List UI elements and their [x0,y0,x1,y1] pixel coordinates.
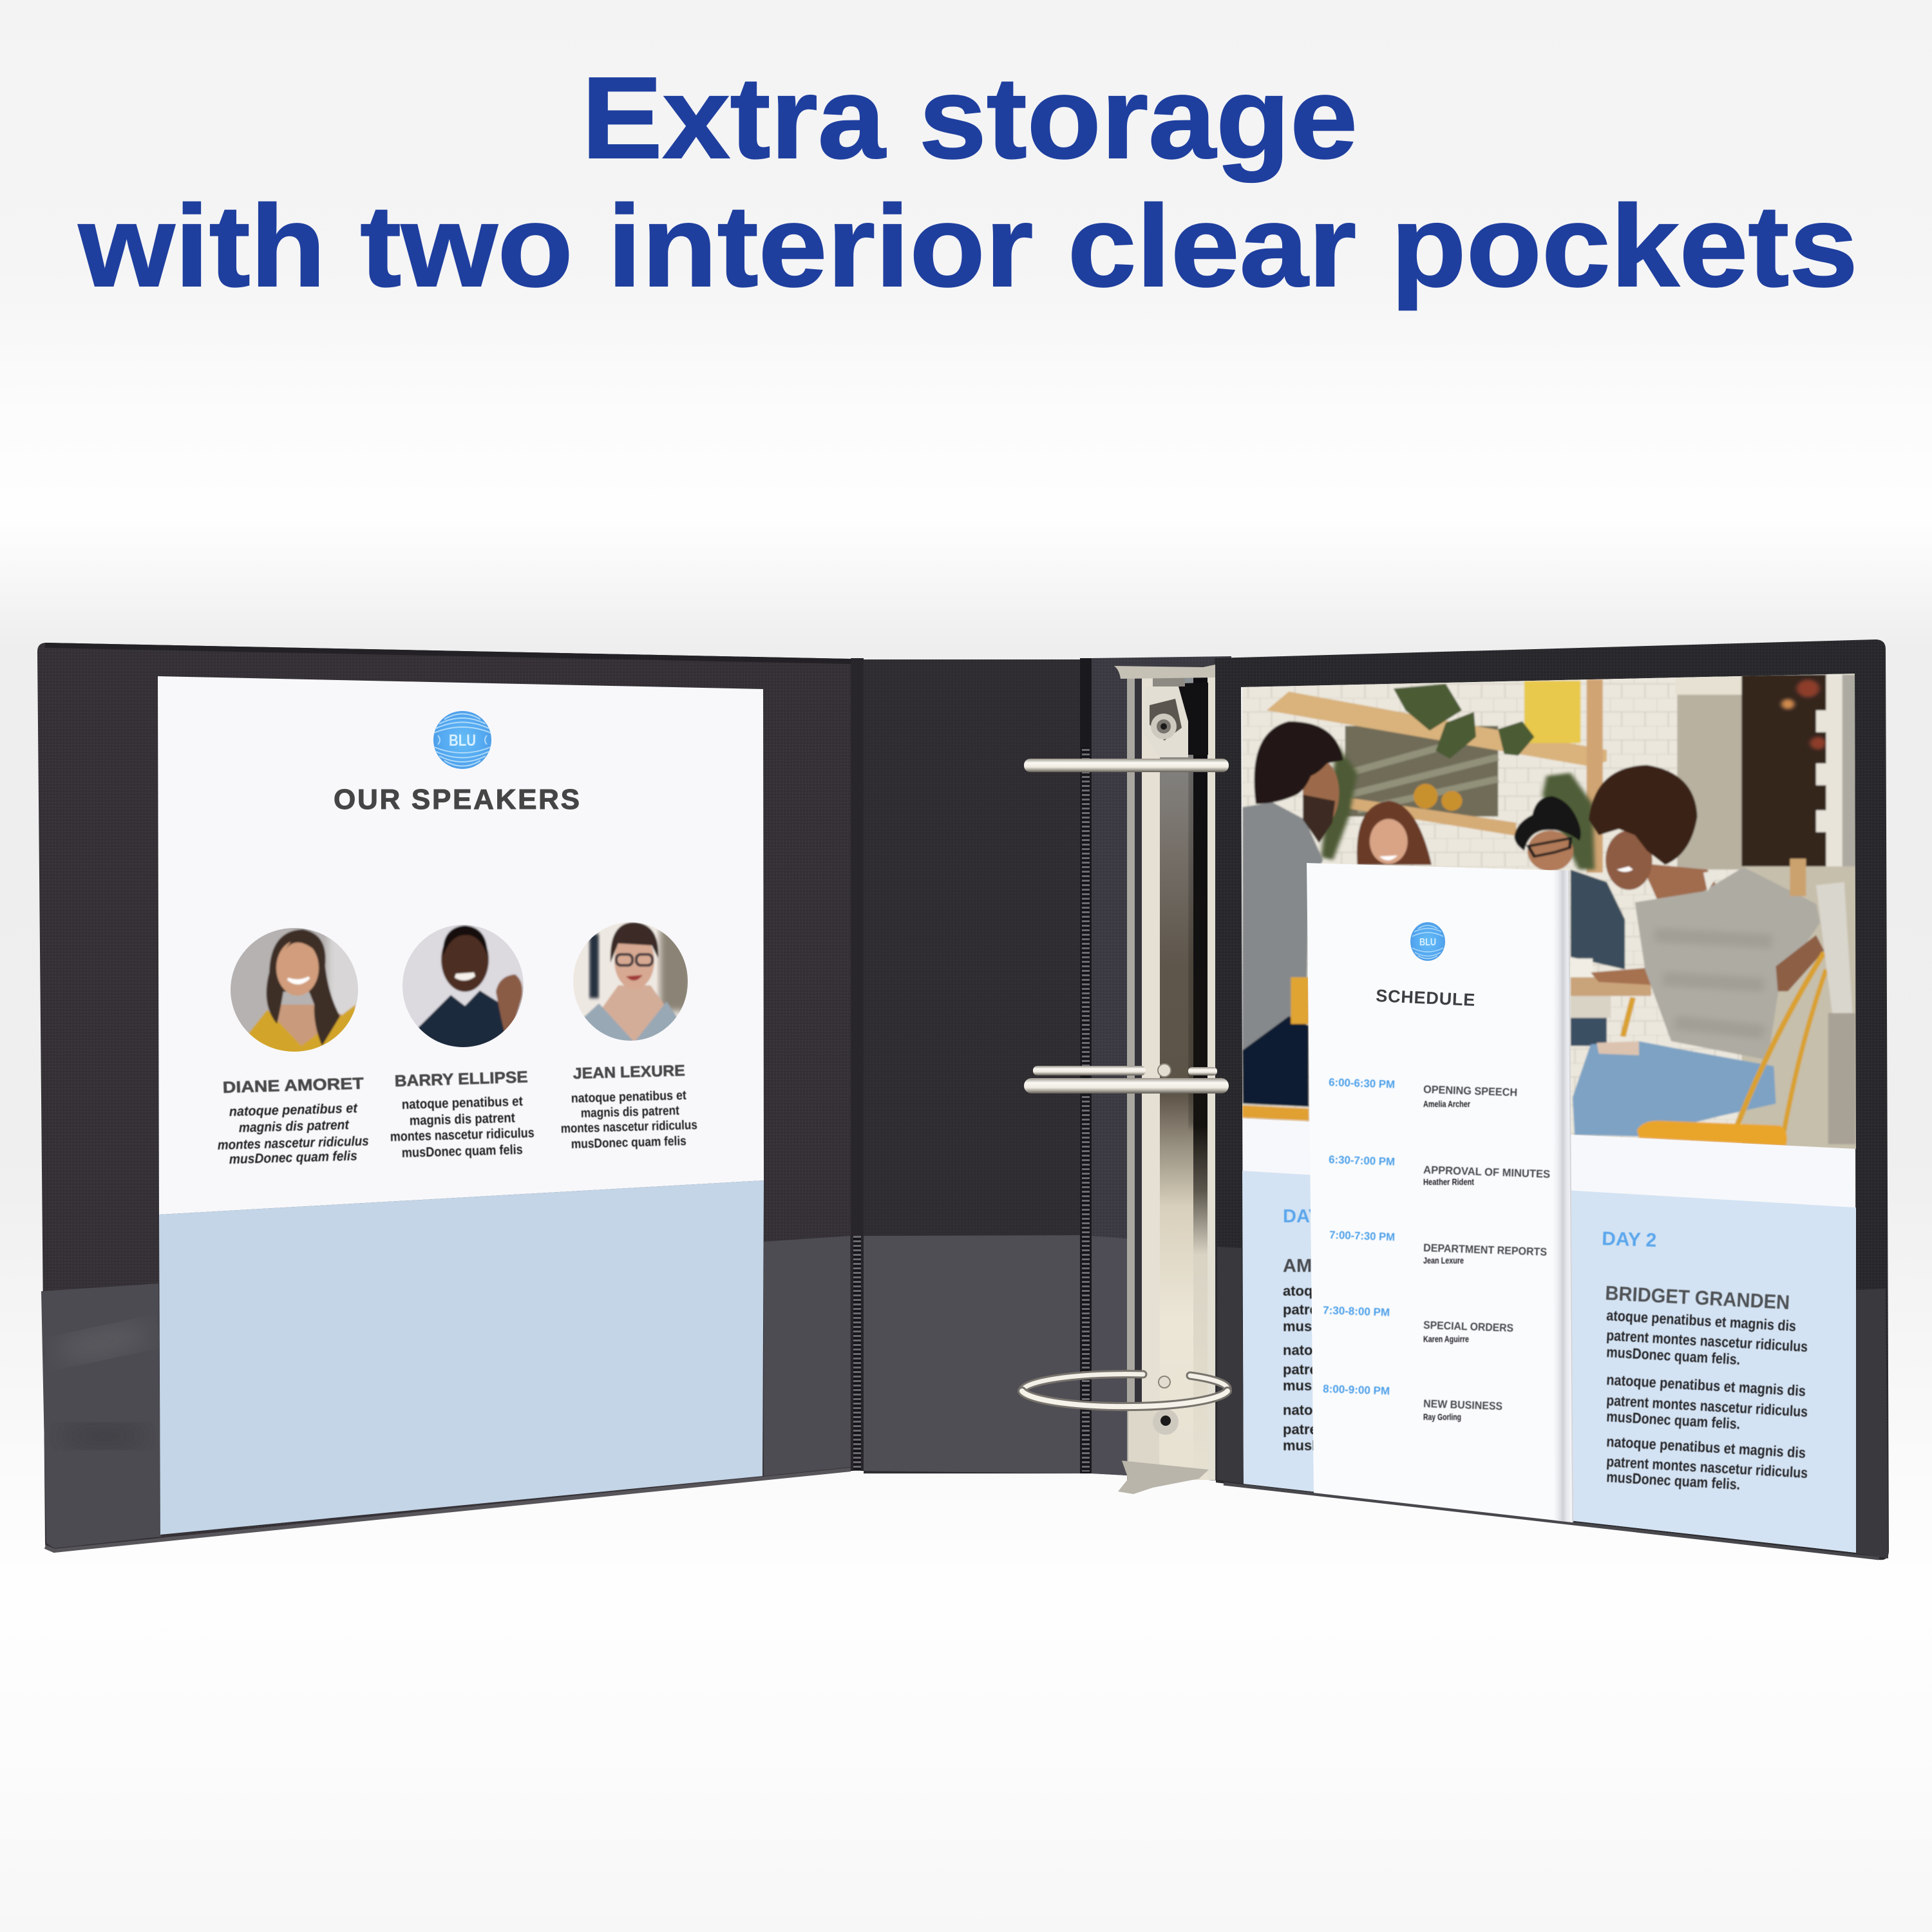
text block: day 1 partial: patrent [1283,1421,1331,1437]
text block: day 1 partial: atoque [1283,1283,1329,1299]
schedule rows: SPECIAL ORDERS [1423,1319,1513,1334]
speaker: Jean Lexure: magnis dis patrent [581,1104,679,1121]
text block: day 1 partial: AMI LEE [1283,1256,1359,1276]
speaker: Jean Lexure [561,1062,697,1151]
woman behind [1357,801,1432,865]
speaker: Jean Lexure: montes nascetur ridiculus [561,1118,697,1136]
panel: schedule insert [1307,863,1573,1522]
text block: day 2: BRIDGET GRANDEN [1605,1282,1790,1314]
schedule rows: Amelia Archer [1423,1099,1470,1109]
heading: our speakers: OUR SPEAKERS [334,784,580,815]
text block: day 2: musDonec quam felis. [1606,1343,1741,1368]
schedule rows: 6:00-6:30 PM [1329,1076,1395,1091]
panel: left paper our speakers [158,676,764,1535]
speaker: Jean Lexure: JEAN LEXURE [573,1062,685,1083]
text block: day 2 [1602,1228,1808,1493]
ring 2 [1024,1066,1229,1094]
portrait: Diane [231,928,358,1052]
schedule rows: 8:00-9:00 PM [1323,1383,1390,1397]
text block: day 1 partial: DAY 1 [1283,1206,1336,1227]
ring 3 [1022,1374,1227,1406]
chair [1734,952,1824,1135]
bottom clip [1118,1461,1209,1494]
text block: day 2: natoque penatibus et magnis dis [1606,1371,1806,1399]
speaker: Barry Ellipse: musDonec quam felis [401,1142,523,1160]
speaker: Diane Amoret [217,1075,369,1167]
speaker: Diane Amoret: musDonec quam felis [229,1148,357,1167]
panel: right paper [1236,670,1868,1553]
text block: day 1 partial: musDon [1283,1437,1340,1454]
icon: BLU logo small: BLU [1419,937,1436,948]
text block: day 1 partial: musDon [1283,1378,1340,1394]
main woman [1591,968,1653,985]
open binder [37,639,1889,1560]
title [78,53,1858,311]
text block: day 1 partial: patrent [1283,1302,1331,1318]
schedule rows: Karen Aguirre [1423,1334,1469,1344]
speaker: Barry Ellipse: BARRY ELLIPSE [394,1068,528,1090]
portrait: Barry [402,925,524,1047]
schedule rows: Ray Gorling [1423,1412,1461,1422]
speaker: Barry Ellipse: natoque penatibus et [401,1094,523,1112]
text block: day 1 partial [1283,1206,1359,1454]
top clip [1114,665,1215,679]
man with hat [1571,869,1625,969]
ring 1 [1024,759,1229,772]
schedule rows: 7:00-7:30 PM [1329,1229,1395,1244]
title: Extra storage [582,53,1358,183]
text block: day 1 partial: patrent [1283,1361,1331,1378]
table and cup [1571,977,1651,996]
speaker: Diane Amoret: DIANE AMORET [222,1075,364,1097]
schedule rows: 6:30-7:00 PM [1329,1153,1395,1168]
speaker: Barry Ellipse: magnis dis patrent [409,1110,515,1128]
ring mechanism [1022,665,1229,1494]
text block: day 2: patrent montes nascetur ridiculus [1606,1453,1808,1481]
text block: day 2: natoque penatibus et magnis dis [1606,1433,1806,1461]
panel: left cover [37,643,851,1551]
schedule rows: OPENING SPEECH [1423,1083,1517,1099]
text block: day 1 partial: natoque [1283,1402,1338,1418]
text block: day 1 partial: musDon [1283,1318,1340,1334]
text block: day 2: musDonec quam felis. [1606,1468,1741,1493]
text block: day 2: atoque penatibus et magnis dis [1606,1307,1797,1334]
panel: spine [851,656,1231,1481]
schedule rows: Jean Lexure [1423,1255,1464,1265]
icon: BLU logo [433,711,491,769]
schedule rows [1323,1076,1550,1422]
speaker: Jean Lexure: musDonec quam felis [571,1134,687,1151]
metal plate [1127,670,1215,1480]
left cover pocket [41,1236,851,1551]
speaker: Barry Ellipse [390,1068,535,1160]
schedule rows: 7:30-8:00 PM [1323,1304,1390,1319]
schedule rows: Heather Rident [1423,1177,1474,1187]
photo: cafe group [1236,670,1868,1159]
text block: day 1 partial: natoque [1283,1342,1338,1358]
schedule rows: DEPARTMENT REPORTS [1423,1242,1547,1258]
man left [1242,802,1323,1054]
speaker: Diane Amoret: montes nascetur ridiculus [217,1133,369,1153]
text block: day 2: patrent montes nascetur ridiculus [1606,1392,1808,1420]
panel: right cover [1215,639,1889,1560]
schedule rows: APPROVAL OF MINUTES [1423,1164,1550,1180]
icon: BLU logo: BLU [449,732,476,750]
speaker: Diane Amoret: natoque penatibus et [229,1101,358,1119]
speaker: Diane Amoret: magnis dis patrent [238,1117,350,1135]
rivets [1151,714,1179,1435]
icon: BLU logo small [1410,922,1445,961]
heading: schedule: SCHEDULE [1376,986,1475,1010]
portrait: Jean [573,922,688,1041]
speaker: Jean Lexure: natoque penatibus et [571,1088,687,1106]
text block: day 2: patrent montes nascetur ridiculus [1606,1327,1808,1355]
schedule rows: NEW BUSINESS [1423,1397,1502,1412]
text block: day 2: DAY 2 [1602,1228,1657,1251]
text block: day 2: musDonec quam felis. [1606,1408,1741,1432]
speaker: Barry Ellipse: montes nascetur ridiculus [390,1126,535,1144]
title: with two interior clear pockets [78,182,1858,311]
